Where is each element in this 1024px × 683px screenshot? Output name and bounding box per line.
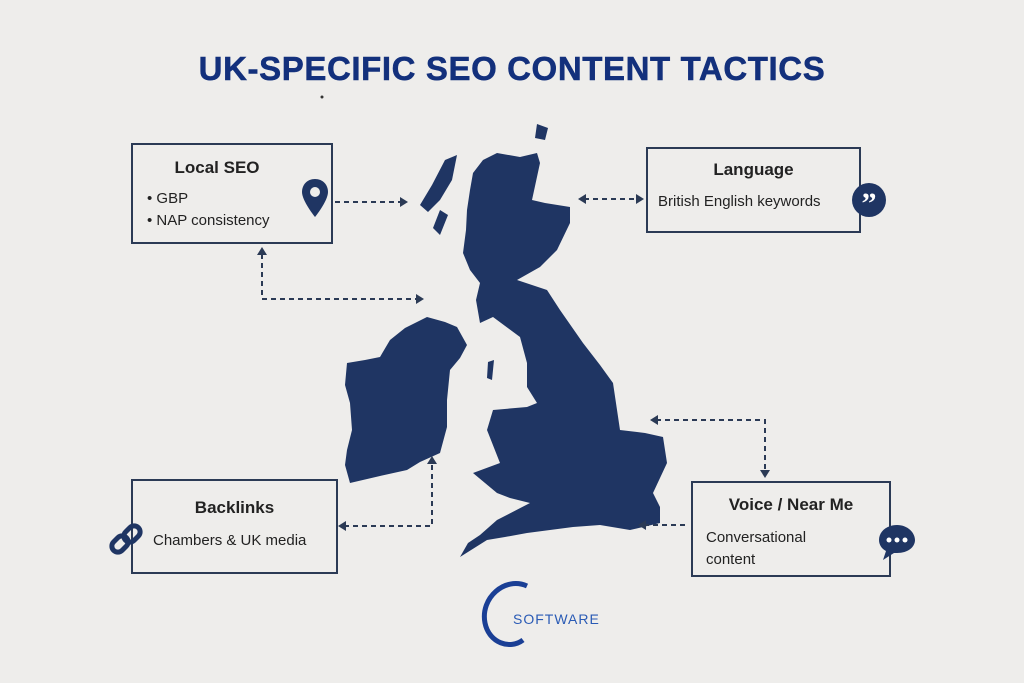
- panel: backlinks: Backlinks: [195, 498, 274, 517]
- panel: backlinks: Chambers & UK media: [153, 532, 306, 549]
- icon: quote: [852, 183, 886, 218]
- panel: language: Language: [713, 160, 794, 179]
- islands: [420, 155, 457, 212]
- panel: local seo: Local SEO: [174, 158, 260, 177]
- panel: language: British English keywords: [658, 193, 821, 210]
- panel: language: [646, 147, 861, 233]
- panel: voice: content: [706, 551, 755, 568]
- panel: voice: [691, 481, 891, 577]
- icon: speech bubble: [879, 525, 915, 560]
- map: great britain: [345, 124, 667, 557]
- panel: backlinks: [131, 479, 338, 574]
- logo: SOFTWARE: [513, 611, 600, 627]
- panel: local seo: • GBP: [147, 190, 188, 207]
- icon: location pin: [302, 179, 328, 217]
- panel: local seo: • NAP consistency: [147, 212, 270, 229]
- panel: voice: Conversational: [706, 529, 806, 546]
- logo: [482, 581, 600, 647]
- title: UK-SPECIFIC SEO CONTENT TACTICS: [199, 50, 825, 87]
- panel: voice: Voice / Near Me: [729, 495, 853, 514]
- panel: local seo: [131, 143, 333, 244]
- icon: chain link: [109, 523, 143, 555]
- map: ireland: [345, 317, 467, 483]
